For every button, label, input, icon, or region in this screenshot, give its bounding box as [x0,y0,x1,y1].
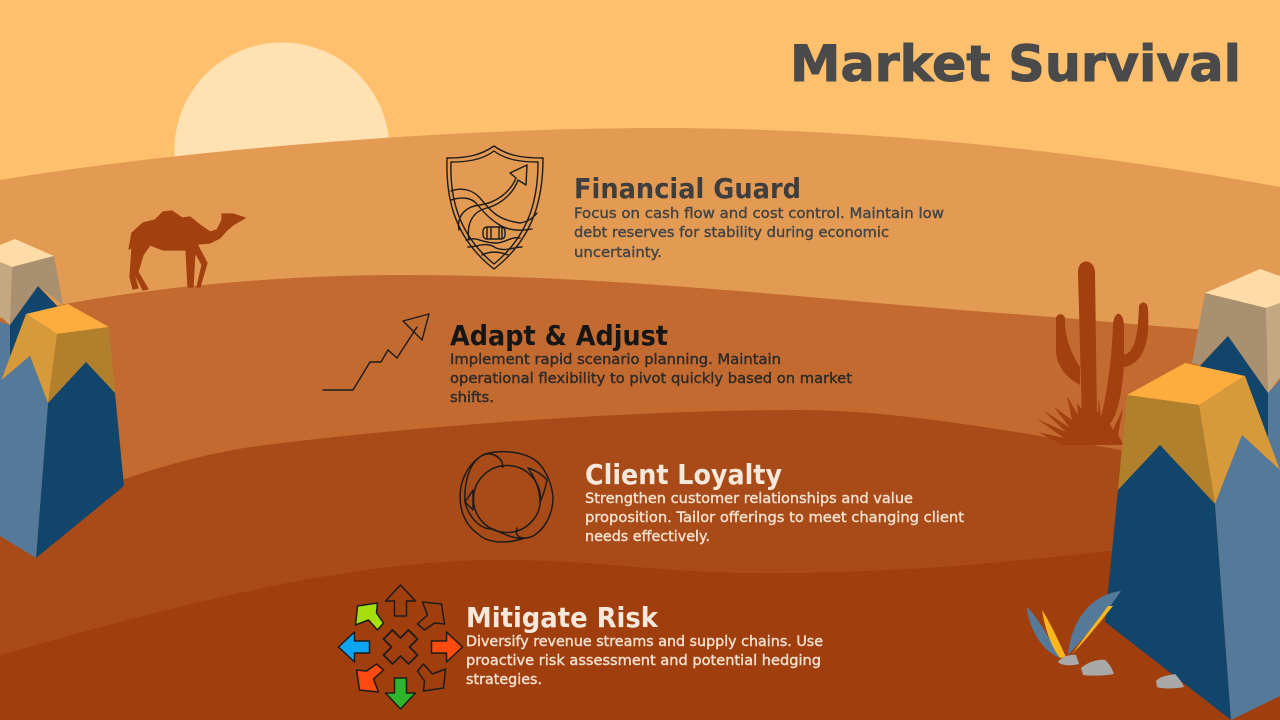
text block: Adapt & Adjust [450,319,852,406]
text block: Financial Guard: Financial Guard [574,172,801,205]
rock: front left [0,304,124,558]
text block: Mitigate Risk: strategies. [466,672,542,688]
icon: rising arrow line [323,314,429,390]
text block: Client Loyalty: needs effectively. [585,529,710,545]
text block: Client Loyalty: proposition. Tailor offerings to meet changing client [585,510,964,526]
text block: Adapt & Adjust: Adapt & Adjust [450,319,668,352]
text block: Client Loyalty: Strengthen customer relationships and value [585,491,913,507]
text block: Adapt & Adjust: Implement rapid scenario planning. Maintain [450,352,781,368]
rock: front right [1105,363,1280,720]
icon: camel silhouette [129,211,245,290]
text block: Adapt & Adjust: operational flexibility to pivot quickly based on market [450,371,852,387]
icon: desert plant and stones [1027,591,1184,688]
text block: Client Loyalty [585,458,964,545]
text block: Financial Guard [574,172,944,261]
text block: Mitigate Risk: proactive risk assessment and potential hedging [466,653,821,669]
dune: lower middle [0,410,1280,720]
icon: loyalty ring [460,452,553,542]
icon: shield with arrow [447,146,543,269]
title: Market Survival [790,35,1241,93]
dune: foreground [0,530,1280,720]
text block: Client Loyalty: Client Loyalty [585,458,782,491]
icon: cactus with grass [1037,262,1148,445]
text block: Financial Guard: debt reserves for stability during economic [574,225,889,241]
rock: back left [0,239,63,381]
text block: Mitigate Risk: Mitigate Risk [466,601,659,634]
text block: Financial Guard: Focus on cash flow and cost control. Maintain low [574,206,944,222]
text block: Mitigate Risk [466,601,823,688]
text block: Mitigate Risk: Diversify revenue streams and supply chains. Use [466,634,823,650]
sun [174,42,390,258]
text block: Financial Guard: uncertainty. [574,245,662,261]
rock: back right [1192,269,1280,475]
text block: Adapt & Adjust: shifts. [450,390,494,406]
icon: ring of arrows [338,585,462,709]
dune: upper middle [0,275,1280,720]
